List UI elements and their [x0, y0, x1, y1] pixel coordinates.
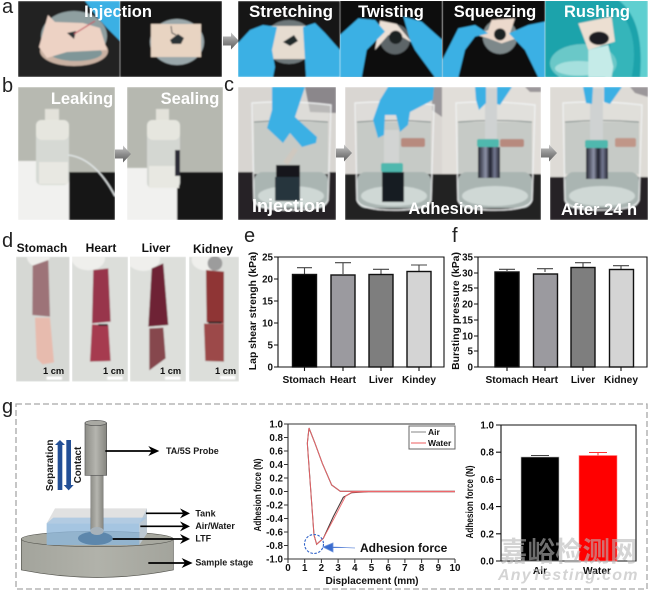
photo: stretching	[238, 1, 340, 77]
bar: Heart	[534, 274, 558, 367]
y ticks	[266, 420, 284, 566]
error bars	[499, 263, 629, 272]
y ticks: 0.6	[480, 475, 495, 486]
probe	[85, 420, 107, 535]
panel c: underwater adhesion photos	[238, 87, 648, 220]
labels: Tank	[195, 509, 216, 519]
bar: Water	[579, 456, 617, 561]
y ticks: 1.0	[480, 420, 495, 432]
organ heading: Liver: Liver	[142, 241, 171, 255]
legend: Water	[428, 438, 452, 448]
organ heading: Heart: Heart	[86, 241, 116, 255]
y ticks: 15	[262, 296, 274, 308]
callout: adhesion force: Adhesion force	[360, 541, 448, 555]
photo: sealing	[127, 87, 223, 220]
y axis title: Lap shear strengh (kPa)	[248, 252, 259, 370]
label: Stretching: Stretching	[249, 2, 333, 21]
y axis title: Adhesion force (N)	[253, 458, 264, 532]
y ticks: -1.0	[266, 554, 284, 566]
line chart: adhesion force vs displacement	[253, 420, 461, 587]
curve: air	[307, 428, 455, 544]
scale label: 1 cm	[160, 366, 181, 376]
x ticks: 0	[285, 563, 291, 574]
panel g label: g	[2, 396, 13, 418]
y axis title: Bursting pressure (kPa)	[451, 252, 462, 370]
y ticks: -0.8	[266, 541, 284, 552]
panel b: bottle photos	[18, 87, 223, 220]
y ticks: 0.2	[480, 529, 495, 540]
y ticks: 20	[462, 300, 474, 310]
bar: Stomach	[292, 274, 316, 367]
label: Rushing: Rushing	[564, 3, 630, 21]
label: Sealing: Sealing	[161, 90, 219, 108]
x ticks: 7	[402, 563, 408, 574]
photo: injected adhesive	[120, 1, 222, 77]
x ticks	[285, 563, 461, 574]
x labels: Stomach	[485, 375, 529, 386]
y ticks: 0	[468, 362, 474, 374]
y ticks: 0.6	[269, 446, 284, 458]
photo: stomach	[16, 244, 70, 382]
label: Injection: Injection	[84, 3, 152, 21]
y ticks: 0.2	[269, 474, 284, 484]
watermark: AnyTesting.com	[497, 567, 639, 584]
panel b label: b	[2, 75, 13, 97]
organ heading: Stomach: Stomach	[17, 241, 67, 255]
x ticks: 10	[450, 563, 461, 574]
photo: kidney	[189, 249, 239, 382]
labels: Separation	[45, 440, 56, 491]
x ticks: 3	[335, 563, 341, 574]
x labels: Air	[533, 566, 547, 577]
panel c label: c	[224, 74, 234, 96]
x ticks: 1	[302, 563, 308, 574]
panel f label: f	[452, 225, 458, 247]
label: Squeezing: Squeezing	[454, 3, 536, 21]
panel e label: e	[244, 225, 255, 247]
LTF adhesive	[78, 532, 113, 545]
photo: injection into tissue	[18, 1, 120, 77]
x labels: Liver	[369, 375, 393, 386]
y ticks: 0	[268, 362, 274, 374]
tank	[47, 508, 147, 545]
photo: rushing	[545, 0, 648, 83]
bar chart: bursting pressure	[451, 252, 647, 386]
bar: Kidney	[610, 270, 634, 367]
y ticks: -0.4	[266, 514, 284, 525]
y ticks: 25	[462, 284, 474, 294]
error bars	[531, 455, 549, 456]
motion arrows	[55, 440, 74, 490]
arrow: c1 to c2	[336, 144, 352, 162]
label: After 24 h: After 24 h	[561, 201, 637, 219]
y ticks: 10	[262, 318, 274, 330]
x ticks: 5	[369, 563, 375, 574]
x labels	[533, 566, 611, 577]
y ticks	[262, 252, 274, 374]
x ticks: 9	[436, 563, 442, 574]
y ticks: 0.4	[480, 502, 495, 513]
bar: Kidney	[407, 272, 431, 367]
organ heading: Kidney: Kidney	[193, 242, 233, 256]
bar chart: adhesion force air vs water	[465, 420, 636, 577]
y ticks: 5	[268, 340, 274, 352]
y ticks: 15	[462, 316, 474, 326]
x labels: Liver	[571, 375, 595, 386]
x ticks: 2	[319, 563, 325, 574]
photo: adhesion	[345, 87, 541, 220]
photo: heart	[72, 246, 128, 382]
arrow	[115, 146, 131, 162]
y ticks: 1.0	[269, 420, 284, 430]
y ticks: 0.0	[480, 556, 495, 568]
bar: Liver	[369, 274, 393, 367]
watermark: 嘉峪检测网	[500, 529, 638, 569]
label: Injection: Injection	[252, 196, 326, 216]
x labels: Heart	[532, 375, 559, 386]
x labels: Stomach	[282, 375, 326, 386]
photo: leaking	[18, 87, 115, 220]
chart frame	[278, 257, 444, 367]
panel d: organ photos	[16, 241, 239, 382]
y ticks	[480, 420, 495, 568]
arrow	[223, 32, 239, 50]
bar: Liver	[571, 268, 595, 367]
curve: water	[307, 428, 455, 544]
scale label: 1 cm	[103, 366, 124, 376]
x axis title: Displacement (mm)	[325, 576, 419, 587]
photo: squeezing	[442, 0, 545, 77]
photo: liver	[130, 256, 186, 382]
schematic: probe test setup	[21, 420, 253, 577]
y ticks: 0.8	[480, 448, 495, 459]
labels: TA/5S Probe	[166, 446, 219, 456]
callout: adhesion force	[304, 534, 448, 555]
y ticks: 10	[462, 332, 474, 342]
y ticks: 0.8	[269, 433, 284, 444]
y ticks: -0.6	[266, 528, 284, 538]
scale label: 1 cm	[43, 366, 64, 376]
bar: Stomach	[495, 272, 519, 367]
y ticks: 20	[262, 274, 274, 286]
legend: Air	[428, 427, 440, 437]
arrow: c2 to c3	[541, 144, 557, 162]
panel g: dashed frame	[16, 404, 647, 589]
bar: Air	[521, 457, 559, 561]
photo: injection underwater	[238, 87, 336, 220]
y ticks: 30	[462, 268, 474, 280]
y ticks: 5	[468, 346, 474, 358]
x ticks: 8	[419, 563, 425, 574]
label: Adhesion: Adhesion	[408, 200, 484, 218]
bar: Heart	[331, 275, 355, 367]
labels: Contact	[73, 446, 84, 483]
curves	[307, 428, 455, 544]
x labels	[485, 375, 638, 386]
labels: Sample stage	[195, 558, 253, 568]
panel a: photo strip	[18, 0, 648, 83]
x labels: Kidney	[604, 375, 638, 386]
label: Twisting: Twisting	[358, 3, 424, 21]
panel d label: d	[2, 230, 13, 252]
y axis title: Adhesion force (N)	[465, 466, 476, 538]
legend	[409, 426, 455, 449]
label: Leaking: Leaking	[51, 90, 113, 108]
bar chart: lap shear strength	[248, 252, 444, 386]
leader arrows	[105, 446, 193, 568]
x labels: Heart	[330, 375, 357, 386]
labels: Air/Water	[195, 521, 235, 531]
x labels	[282, 375, 436, 386]
sample stage	[21, 531, 173, 577]
x ticks: 4	[352, 563, 358, 574]
y ticks: 0.0	[269, 487, 284, 498]
photo: twisting	[340, 0, 442, 77]
y ticks: 25	[262, 252, 274, 264]
y ticks: 0.4	[269, 460, 284, 471]
labels: LTF	[195, 534, 212, 544]
scale label: 1 cm	[215, 366, 236, 376]
photo: after 24 h	[550, 87, 648, 220]
labels	[45, 440, 253, 568]
chart frame	[478, 257, 647, 367]
axes	[288, 424, 455, 559]
x ticks: 6	[385, 563, 391, 574]
y ticks: -0.2	[266, 500, 284, 512]
chart frame	[501, 425, 636, 561]
x labels: Kindey	[402, 375, 436, 386]
y ticks: 35	[462, 252, 474, 264]
x labels: Water	[583, 566, 611, 577]
y ticks	[462, 252, 474, 374]
error bars	[297, 263, 427, 274]
